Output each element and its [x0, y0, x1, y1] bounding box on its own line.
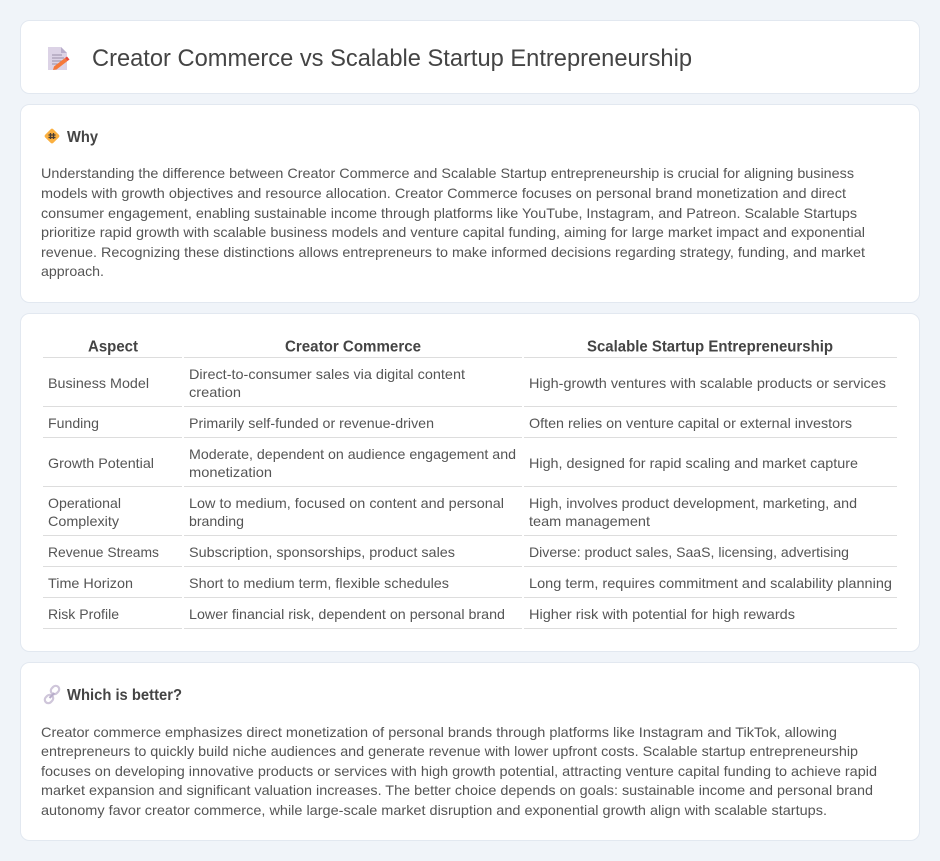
text block: why paragraph: prioritize rapid growth with scalable business models and venture capital funding, aiming for large market impact and exponential — [41, 224, 865, 240]
row: revenue streams: Revenue Streams — [48, 544, 159, 560]
panel: comparison table — [20, 314, 920, 652]
text block: which paragraph: focuses on developing innovative products or services with high growth potential, attracting venture capital funding to achieve rapid — [41, 763, 877, 779]
row: growth potential: monetization — [189, 464, 272, 480]
row: growth potential — [48, 446, 858, 480]
row: time horizon: Time Horizon — [48, 575, 133, 591]
row: growth potential: Moderate, dependent on audience engagement and — [189, 446, 516, 462]
row: revenue streams: Diverse: product sales, SaaS, licensing, advertising — [529, 544, 849, 560]
panel: which is better — [20, 662, 920, 840]
row: operational complexity: team management — [529, 513, 650, 529]
panel: why — [20, 104, 920, 302]
text block: why paragraph: models with growth objectives and resource allocation. Creator Commerce focuses on personal brand monetization and direct — [41, 185, 846, 201]
row: risk profile: Risk Profile — [48, 606, 119, 622]
heading: why: Why — [67, 129, 98, 146]
row: growth potential: Growth Potential — [48, 455, 154, 471]
text block: which paragraph: Creator commerce emphasizes direct monetization of personal brands through platforms like Instagram and TikTok, allowing — [41, 724, 837, 740]
row: time horizon — [48, 575, 892, 591]
row: business model: High-growth ventures with scalable products or services — [529, 375, 886, 391]
text block: which paragraph: entrepreneurs to quickly build niche audiences and generate revenue with lower upfront costs. Scalable startup entrepreneurship — [41, 743, 858, 759]
panel: header — [20, 20, 920, 94]
row: time horizon: Long term, requires commitment and scalability planning — [529, 575, 892, 591]
row: revenue streams: Subscription, sponsorships, product sales — [189, 544, 455, 560]
icon: diamond sign — [44, 128, 60, 144]
row: time horizon: Short to medium term, flexible schedules — [189, 575, 449, 591]
text block: which paragraph — [41, 724, 877, 818]
text block: why paragraph: consumer engagement, enabling sustainable income through platforms like YouTube, Instagram, and Patreon. Scalable Startups — [41, 205, 857, 221]
row: growth potential: High, designed for rapid scaling and market capture — [529, 455, 858, 471]
row: funding — [48, 415, 852, 431]
text block: why paragraph — [41, 165, 865, 279]
row: operational complexity — [48, 495, 857, 529]
icon: link — [43, 684, 61, 705]
table header — [88, 338, 833, 356]
row: operational complexity: Operational — [48, 495, 121, 511]
row: risk profile — [48, 606, 795, 622]
table header: Creator Commerce — [285, 338, 421, 356]
row: revenue streams — [48, 544, 849, 560]
text block: which paragraph: market expansion and significant valuation increases. The better choice depends on goals: sustainable income and personal brand — [41, 782, 873, 798]
row: operational complexity: branding — [189, 513, 244, 529]
title: Creator Commerce vs Scalable Startup Entrepreneurship — [92, 45, 692, 72]
row: risk profile: Higher risk with potential for high rewards — [529, 606, 795, 622]
row: risk profile: Lower financial risk, dependent on personal brand — [189, 606, 505, 622]
row: business model — [48, 366, 886, 400]
row: operational complexity: High, involves product development, marketing, and — [529, 495, 857, 511]
text block: why paragraph: approach. — [41, 263, 104, 279]
row: operational complexity: Low to medium, focused on content and personal — [189, 495, 504, 511]
heading: which is better: Which is better? — [67, 687, 182, 704]
row: operational complexity: Complexity — [48, 513, 119, 529]
text block: why paragraph: revenue. Recognizing these distinctions allows entrepreneurs to make informed decisions regarding strategy, funding, and market — [41, 244, 865, 260]
table header: Aspect — [88, 338, 139, 356]
row: business model: Direct-to-consumer sales via digital content — [189, 366, 465, 382]
text block: why paragraph: Understanding the difference between Creator Commerce and Scalable Startup entrepreneurship is crucial for aligning business — [41, 165, 854, 181]
row: funding: Primarily self-funded or revenue-driven — [189, 415, 434, 431]
table header: Scalable Startup Entrepreneurship — [587, 338, 833, 356]
icon: memo with pencil — [48, 47, 70, 70]
row: business model: Business Model — [48, 375, 149, 391]
row: funding: Funding — [48, 415, 99, 431]
row: business model: creation — [189, 384, 241, 400]
row: funding: Often relies on venture capital or external investors — [529, 415, 852, 431]
text block: which paragraph: autonomy favor creator commerce, while large-scale market disruption and exponential growth align with scalable startups. — [41, 802, 827, 818]
